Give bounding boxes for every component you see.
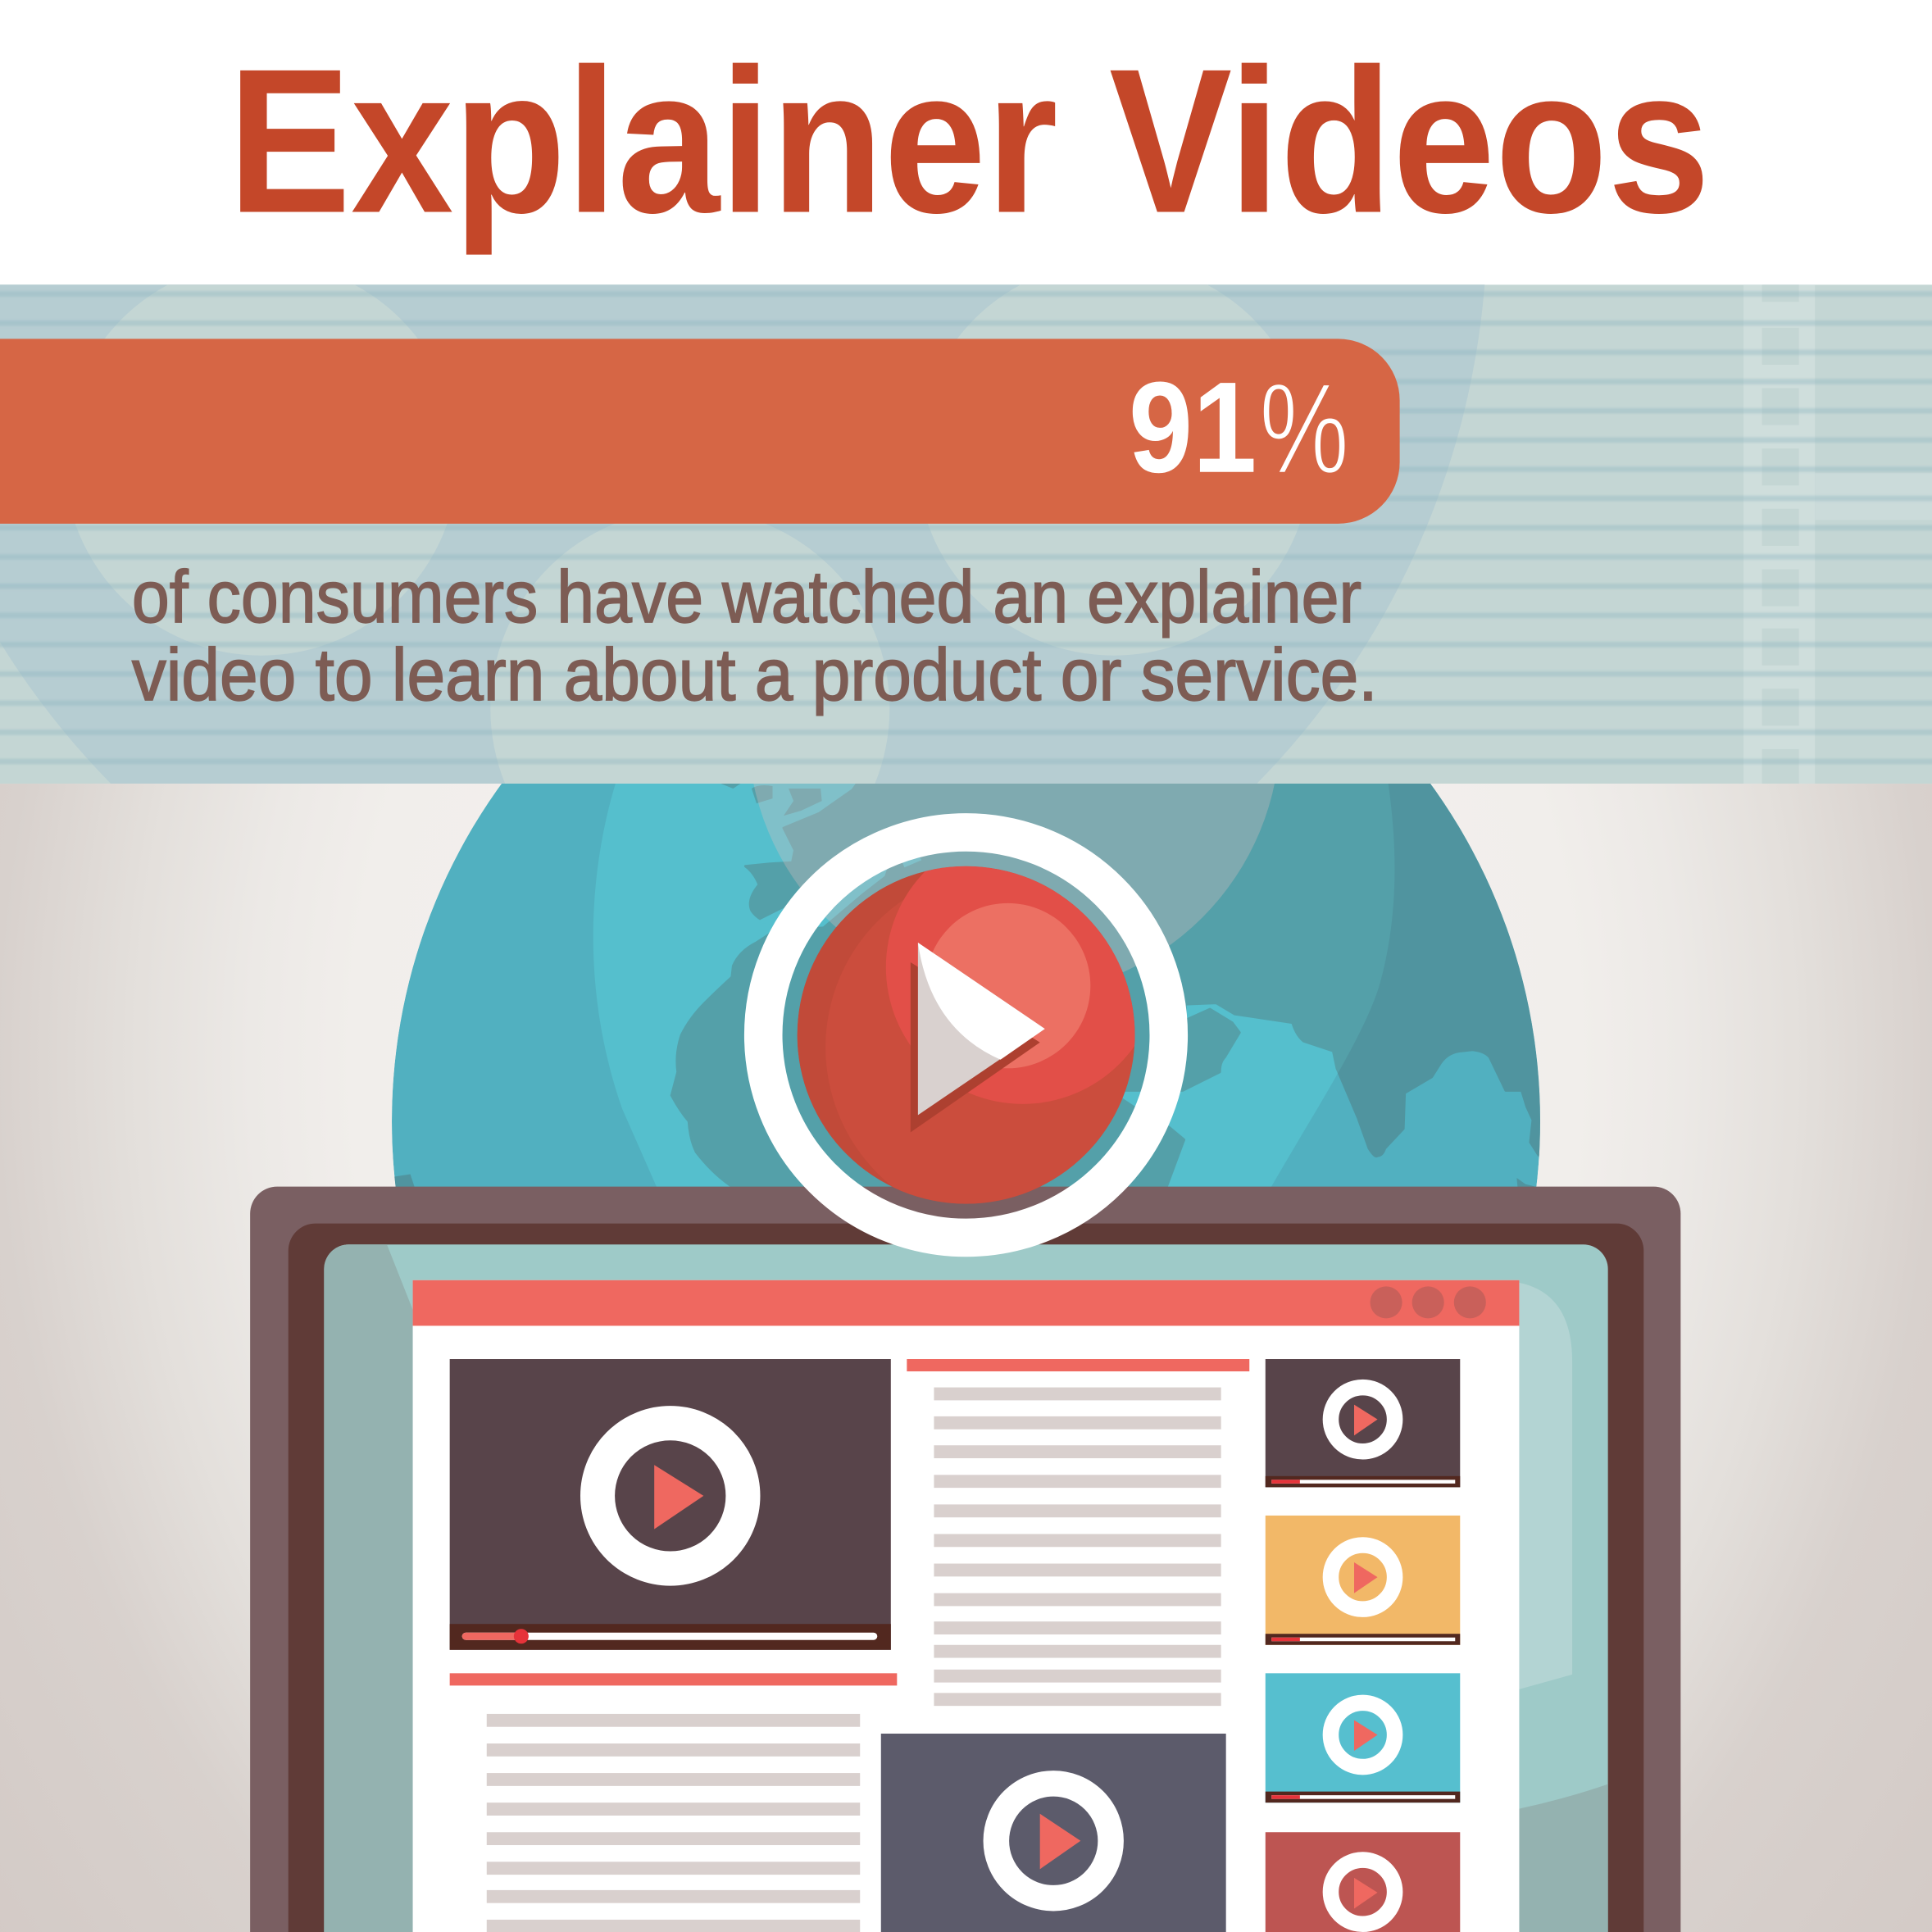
triangle highlight <box>918 943 1045 1060</box>
red disc <box>797 866 1134 1204</box>
stat band <box>0 284 1932 784</box>
percentage bar <box>0 339 1400 524</box>
monitor outer frame <box>250 1187 1680 1932</box>
second video player <box>881 1734 1226 1932</box>
screen left shade <box>324 1244 413 1932</box>
column text lines <box>934 1388 1221 1706</box>
monitor screen <box>324 1244 1608 1932</box>
description text <box>132 556 1378 716</box>
main progress bar <box>462 1629 877 1643</box>
monitor inner frame <box>289 1224 1643 1932</box>
globe sea strip <box>760 857 921 927</box>
main play icon <box>598 1423 743 1569</box>
white ring <box>763 832 1169 1238</box>
band light circle centre <box>490 524 889 784</box>
stat value: % <box>1259 357 1349 502</box>
globe ocean <box>392 784 1540 1187</box>
thumbnail: red <box>1266 1832 1460 1932</box>
triangle base <box>918 943 1045 1115</box>
globe landmasses <box>671 776 1571 1193</box>
lower text lines <box>487 1714 860 1932</box>
browser dots <box>1371 1286 1486 1318</box>
band light circle right <box>928 285 1300 656</box>
bar shape <box>0 339 1400 524</box>
thumbnail: teal <box>1266 1673 1460 1802</box>
band stripes <box>0 291 1932 764</box>
large play button <box>763 830 1183 1238</box>
lower background <box>0 784 1932 1932</box>
screen lower-right shade <box>1519 1784 1608 1932</box>
thumbnail: orange <box>1266 1516 1460 1645</box>
triangle shadow <box>911 962 1040 1132</box>
main video player <box>450 1359 891 1650</box>
film strip <box>1743 284 1815 784</box>
band light circle left <box>75 285 448 656</box>
column heading bar <box>907 1359 1249 1371</box>
title: Explainer Videos <box>228 27 1710 257</box>
globe outer shading <box>392 784 1540 1187</box>
globe <box>392 784 1540 1187</box>
globe islands <box>392 784 1535 1193</box>
web page <box>413 1280 1519 1932</box>
band big circle <box>0 284 1485 784</box>
screen glare <box>1519 1283 1572 1689</box>
thumbnail: dark <box>1266 1359 1460 1487</box>
page body <box>413 1280 1519 1932</box>
band base <box>0 284 1932 784</box>
lower heading bar <box>450 1673 897 1685</box>
browser header <box>413 1280 1519 1325</box>
description text: of consumers have watched an explainer <box>132 556 1361 639</box>
monitor <box>250 1187 1680 1932</box>
description text: video to learn about a product or service. <box>132 634 1378 716</box>
stat value <box>1129 356 1349 502</box>
globe highlight circle <box>753 784 1275 972</box>
stat value: 91 <box>1129 356 1257 500</box>
